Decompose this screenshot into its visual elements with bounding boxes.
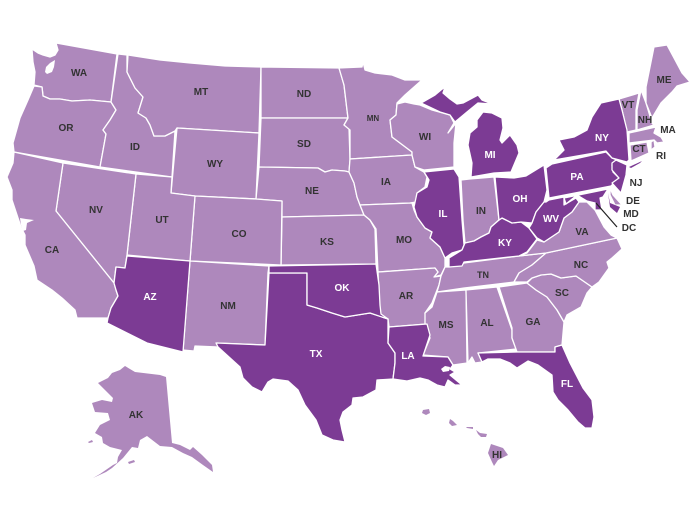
- label: MT: MT: [194, 87, 208, 98]
- label: VA: VA: [575, 227, 589, 238]
- state: Georgia: [499, 283, 564, 352]
- label: AK: AK: [129, 410, 144, 421]
- label: OR: OR: [58, 123, 74, 134]
- label: ME: ME: [656, 75, 672, 86]
- state: Oklahoma: [269, 264, 388, 319]
- label: ND: ND: [297, 89, 311, 100]
- state: Hawaii Oahu: [449, 419, 457, 426]
- label: LA: LA: [401, 351, 415, 362]
- state: North Dakota: [261, 67, 348, 118]
- state: Idaho: [100, 54, 175, 177]
- label: HI: HI: [492, 450, 502, 461]
- label: PA: PA: [570, 172, 584, 183]
- state: Michigan lower: [468, 112, 519, 177]
- label: ID: ID: [130, 142, 140, 153]
- state: Missouri: [360, 203, 445, 277]
- water: Puget Sound: [45, 60, 55, 74]
- state: New Jersey: [612, 160, 627, 193]
- map: dark states: [107, 87, 642, 442]
- label: KS: KS: [320, 237, 334, 248]
- state: Pennsylvania: [546, 152, 622, 198]
- label: KY: KY: [498, 238, 512, 249]
- state: Utah: [127, 174, 195, 261]
- state: Louisiana: [388, 324, 462, 387]
- label: NY: NY: [595, 133, 609, 144]
- state: Alaska islands: [88, 440, 93, 443]
- label: TN: TN: [477, 270, 489, 280]
- state: South Carolina: [527, 274, 592, 322]
- state: Massachusetts: [629, 127, 664, 143]
- label: SC: SC: [555, 288, 569, 299]
- label: WY: WY: [207, 159, 223, 170]
- state: Kansas: [281, 215, 376, 265]
- label: RI: RI: [656, 151, 666, 162]
- state: Maryland: [564, 189, 608, 210]
- state: Hawaii big island: [488, 444, 508, 466]
- state: Ohio: [495, 165, 547, 223]
- state: Kodiak island: [128, 460, 135, 464]
- state: Oregon: [13, 86, 116, 167]
- state: Colorado: [190, 196, 282, 265]
- label: NJ: NJ: [630, 178, 642, 189]
- state: West Virginia: [529, 197, 579, 242]
- label: MD: MD: [623, 209, 639, 220]
- label: WV: WV: [543, 214, 559, 225]
- state: Wisconsin: [390, 102, 456, 170]
- state: Nevada: [56, 163, 136, 283]
- labels: states: [45, 68, 676, 461]
- label: MS: MS: [438, 320, 454, 331]
- label: AR: AR: [399, 291, 414, 302]
- state: Virginia: [519, 202, 617, 256]
- state: Delaware: [610, 188, 622, 205]
- state: Texas: [216, 273, 395, 442]
- state: New York: [554, 99, 629, 162]
- label: MI: MI: [484, 150, 496, 161]
- state: Arizona: [107, 256, 190, 352]
- label: NM: NM: [220, 301, 236, 312]
- label: MA: MA: [660, 125, 676, 136]
- state: Wyoming: [171, 128, 259, 199]
- state: Alaska: [92, 366, 213, 478]
- label: NE: NE: [305, 186, 319, 197]
- leader line: DC: [596, 203, 617, 227]
- state: Washington: [32, 43, 117, 102]
- label: DC: DC: [622, 223, 636, 234]
- label: MN: MN: [367, 114, 379, 123]
- label: IL: IL: [439, 209, 447, 220]
- state: Vermont: [619, 93, 639, 132]
- state: Hawaii Kauai: [422, 409, 430, 415]
- labels: dark states: [143, 133, 609, 390]
- state: Rhode Island: [651, 140, 655, 150]
- label: WI: WI: [419, 132, 431, 143]
- label: CA: CA: [45, 245, 59, 256]
- state: Montana: [127, 55, 261, 136]
- label: AZ: AZ: [143, 292, 157, 303]
- label: IN: IN: [476, 206, 486, 217]
- label: GA: GA: [526, 317, 540, 328]
- state: North Carolina: [514, 238, 622, 287]
- label: MO: MO: [396, 235, 412, 246]
- state: Long Island: [629, 161, 642, 168]
- state: Mississippi: [423, 290, 467, 365]
- label: NV: NV: [89, 205, 103, 216]
- label: AL: AL: [480, 318, 494, 329]
- state: Indiana: [461, 177, 499, 243]
- label: FL: FL: [561, 379, 573, 390]
- label: NH: NH: [638, 115, 652, 126]
- state: Tennessee: [437, 253, 546, 292]
- state: New Mexico: [183, 261, 269, 351]
- state: Hawaii Maui: [476, 430, 487, 437]
- state: Michigan upper: [421, 87, 492, 122]
- state: California: [7, 152, 118, 318]
- label: IA: IA: [381, 177, 391, 188]
- label: VT: VT: [622, 100, 634, 111]
- state: Connecticut: [630, 142, 649, 161]
- label: OH: OH: [512, 194, 528, 205]
- state: Arkansas: [378, 268, 441, 327]
- water: San Francisco Bay: [20, 218, 34, 231]
- label: CT: CT: [632, 144, 646, 155]
- state: Alabama: [466, 287, 516, 363]
- state: Nebraska: [256, 167, 364, 217]
- label: OK: OK: [334, 283, 350, 294]
- label: NC: NC: [574, 260, 588, 271]
- label: SD: SD: [297, 139, 311, 150]
- state: Minnesota: [339, 62, 422, 159]
- state: Hawaii Molokai: [466, 427, 473, 429]
- label: TX: TX: [310, 349, 323, 360]
- state: Florida: [478, 345, 594, 428]
- state: New Hampshire: [637, 90, 654, 130]
- state: Iowa: [349, 155, 427, 205]
- label: DE: DE: [626, 196, 640, 207]
- state: Illinois: [414, 169, 464, 258]
- state: Maryland eastern shore: [608, 193, 620, 213]
- state: South Dakota: [259, 118, 350, 172]
- label: CO: CO: [232, 229, 247, 240]
- label: UT: UT: [155, 215, 169, 226]
- water: Lake Pontchartrain: [441, 366, 450, 372]
- state: Kentucky: [449, 218, 537, 267]
- label: WA: WA: [71, 68, 87, 79]
- state: Maine: [646, 45, 690, 118]
